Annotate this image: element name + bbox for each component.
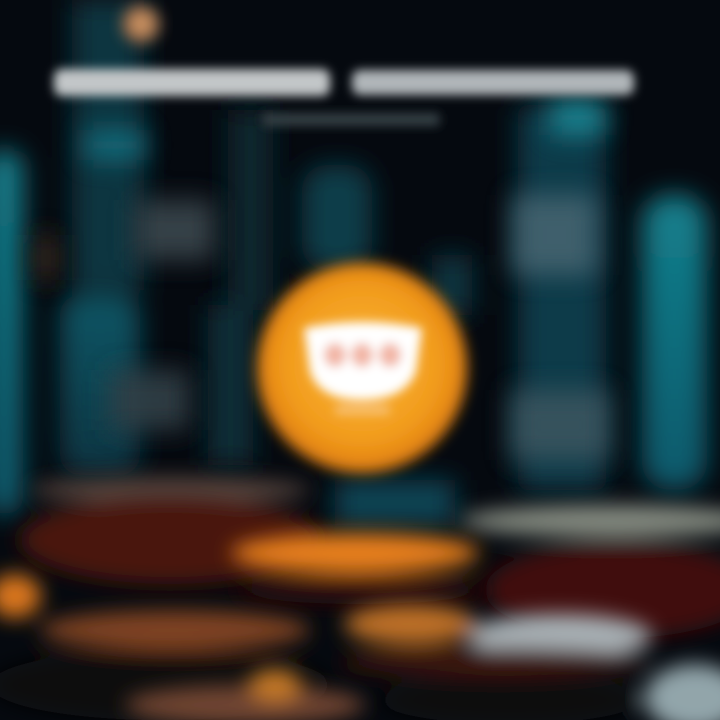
background columns <box>0 0 707 525</box>
icon: small orange dot at top <box>121 4 161 44</box>
disc: right top <box>460 505 720 638</box>
disc: lower right <box>340 604 720 720</box>
grey building details <box>35 100 610 460</box>
coin glyph: white emblem <box>304 322 422 414</box>
disc: left top <box>20 477 320 584</box>
coin body <box>257 263 467 473</box>
disc: lower left <box>0 574 330 720</box>
icon: orange coin <box>257 263 467 473</box>
disc: bottom centre <box>125 669 365 720</box>
disc: centre orange <box>231 533 485 604</box>
title <box>54 69 634 96</box>
stacked discs at the bottom <box>0 477 720 720</box>
subtitle <box>262 113 440 126</box>
